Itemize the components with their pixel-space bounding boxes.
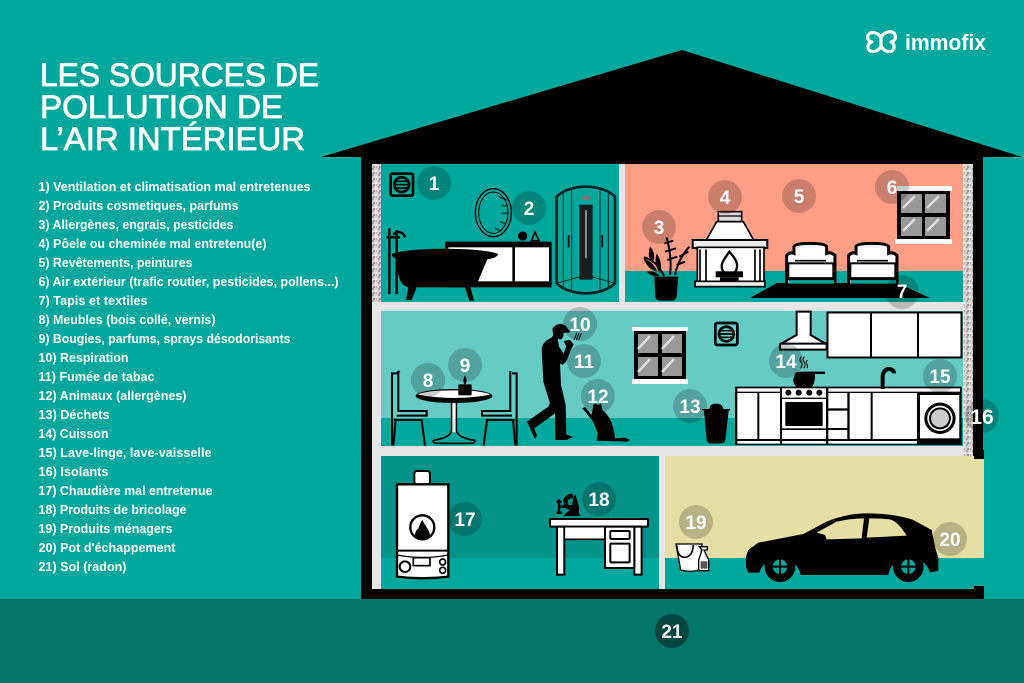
legend list: 5) Revêtements, peintures [38,256,193,270]
icon: kitchen counter [735,387,962,445]
icon: car [746,513,938,582]
legend list: 1) Ventilation et climatisation mal entretenues [38,180,311,194]
icon: plant [643,237,689,301]
legend list: 16) Isolants [38,465,109,479]
icon: shower [557,187,615,293]
legend list: 12) Animaux (allergènes) [38,389,186,403]
marker 13 [673,389,707,423]
icon: trash bin [701,404,731,443]
marker 21: 21 [661,622,683,643]
logo: immofix: immofix [905,30,987,55]
marker 15 [923,359,957,393]
legend list: 18) Produits de bricolage [38,503,187,517]
legend list: 19) Produits ménagers [38,522,173,536]
house shell [361,157,983,599]
marker 6 [875,170,909,204]
icon: boiler [397,471,448,578]
icon: bucket [676,544,709,571]
legend list: 4) Pôele ou cheminée mal entretenu(e) [38,237,266,251]
icon: window [895,186,952,244]
marker 4 [708,180,742,214]
icon: man smoking [527,324,581,440]
marker 14: 14 [775,352,797,373]
marker 10 [563,307,597,341]
title: L’AIR INTÉRIEUR [40,121,305,157]
legend list: 6) Air extérieur (trafic routier, pesticides, pollens...) [38,275,338,289]
marker 9: 9 [460,356,470,377]
marker 3 [642,210,676,244]
legend list: 2) Produits cosmetiques, parfums [38,199,239,213]
panel: kitchen and dining room [381,311,963,446]
marker 20 [933,522,967,556]
legend list: 10) Respiration [38,351,128,365]
panel: boiler room [381,456,659,589]
marker 1 [417,166,451,200]
legend list: 13) Déchets [38,408,110,422]
marker 2 [512,191,546,225]
icon: mirror [475,189,511,237]
legend list: 17) Chaudière mal entretenue [38,484,213,498]
icon: chair right [482,371,517,446]
panel: living room [625,164,963,302]
roof [321,50,1022,157]
marker 7 [885,275,919,309]
icon: cooking pot [793,357,825,388]
marker 7: 7 [897,282,907,303]
marker 11: 11 [574,352,594,373]
marker 18: 18 [588,490,610,511]
icon: ventilation grille [715,323,737,345]
icon: candle [458,376,472,395]
title [40,57,319,157]
legend list: 21) Sol (radon) [38,560,126,574]
marker 5 [782,179,816,213]
marker 1: 1 [429,174,440,195]
icon: window [632,327,688,384]
panel: bathroom [381,164,619,302]
marker 2: 2 [524,199,534,220]
title: LES SOURCES DE [40,57,319,93]
icon: desk [550,519,648,575]
marker 17: 17 [454,510,476,531]
legend list [38,180,338,574]
marker 18 [582,482,616,516]
legend list: 14) Cuisson [38,427,108,441]
marker 20: 20 [939,530,961,551]
ground [0,599,1024,683]
icon: wall cabinets [828,312,962,358]
icon: bathtub [387,228,498,301]
icon: chair left [392,371,427,446]
icon: vanity unit [445,231,552,287]
marker 17 [448,502,482,536]
icon: vise [557,493,581,516]
title: POLLUTION DE [40,89,283,125]
icon: faucet [883,369,894,389]
marker 12 [581,379,615,413]
icon: rug [750,283,930,298]
marker 8: 8 [423,371,433,392]
legend list: 15) Lave-linge, lave-vaisselle [38,446,212,460]
marker 16: 16 [970,406,994,429]
marker 8 [411,363,445,397]
marker 16 [965,399,999,433]
legend list: 8) Meubles (bois collé, vernis) [38,313,216,327]
marker 11 [567,344,601,378]
legend list: 11) Fumée de tabac [38,370,155,384]
marker 12: 12 [587,387,609,408]
legend list: 7) Tapis et textiles [38,294,148,308]
marker 6: 6 [887,178,897,199]
marker 21 [655,614,689,648]
marker 9 [448,348,482,382]
marker 19: 19 [685,513,707,534]
marker 15: 15 [929,367,951,388]
icon: fireplace [693,212,767,287]
icon: cooker hood [780,312,827,350]
legend list: 3) Allergènes, engrais, pesticides [38,218,234,232]
marker 19 [679,505,713,539]
icon: dining table [416,389,492,443]
logo: immofix [868,30,987,55]
marker 14 [769,344,803,378]
legend list: 9) Bougies, parfums, sprays désodorisants [38,332,291,346]
panel: garage [665,450,984,599]
number markers [411,166,999,648]
icon: ventilation grille [391,174,413,196]
marker 3: 3 [654,218,664,239]
icon: armchair left [787,243,835,284]
marker 13: 13 [679,397,701,418]
marker 4: 4 [720,188,731,209]
marker 10: 10 [569,315,591,336]
icon: cat [582,403,630,442]
icon: armchair right [849,243,897,284]
marker 5: 5 [794,187,805,208]
legend list: 20) Pot d'échappement [38,541,176,555]
